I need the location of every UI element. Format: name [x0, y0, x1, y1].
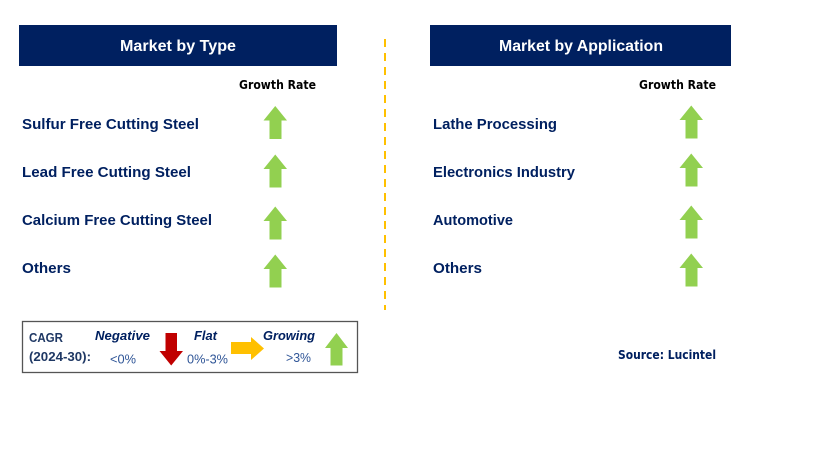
legend title	[29, 331, 91, 364]
growth rate label: Growth Rate	[639, 77, 716, 92]
legend title: CAGR	[29, 331, 63, 345]
row: automotive: Automotive	[433, 213, 513, 229]
row: calcium free cutting steel	[22, 206, 287, 240]
row: others	[22, 254, 287, 288]
legend: negative: Negative	[95, 328, 150, 343]
heading: market by application	[430, 25, 731, 66]
row: calcium free cutting steel: Calcium Free Cutting Steel	[22, 213, 212, 229]
panel: market by application	[430, 25, 731, 286]
source note: Source: Lucintel	[618, 347, 716, 362]
row: others: Others	[433, 261, 482, 277]
row: lead free cutting steel	[22, 154, 287, 188]
growth rate label: Growth Rate	[239, 77, 316, 92]
legend: negative	[95, 328, 183, 366]
row: lathe processing: Lathe Processing	[433, 117, 557, 133]
heading: market by type: Market by Type	[120, 38, 236, 55]
row: others: Others	[22, 261, 71, 277]
panel: market by type	[19, 25, 337, 288]
row: lead free cutting steel: Lead Free Cutting Steel	[22, 165, 191, 181]
row: sulfur free cutting steel: Sulfur Free Cutting Steel	[22, 117, 199, 133]
legend: growing: Growing	[263, 328, 315, 343]
legend: growing	[263, 328, 348, 366]
row: others	[433, 254, 703, 286]
row: electronics industry	[433, 154, 703, 186]
legend: flat	[187, 328, 264, 366]
legend: CAGR	[22, 322, 358, 372]
row: sulfur free cutting steel	[22, 106, 287, 139]
divider: dashed orange line	[384, 39, 386, 310]
legend: negative: <0%	[110, 352, 136, 366]
legend title: (2024-30):	[29, 350, 91, 364]
heading: market by application: Market by Application	[499, 38, 663, 55]
row: lathe processing	[433, 106, 703, 138]
legend: flat: Flat	[194, 328, 218, 343]
legend: flat: 0%-3%	[187, 352, 228, 366]
row: automotive	[433, 206, 703, 238]
legend: growing: >3%	[286, 350, 311, 365]
heading: market by type	[19, 25, 337, 66]
row: electronics industry: Electronics Industry	[433, 165, 575, 181]
